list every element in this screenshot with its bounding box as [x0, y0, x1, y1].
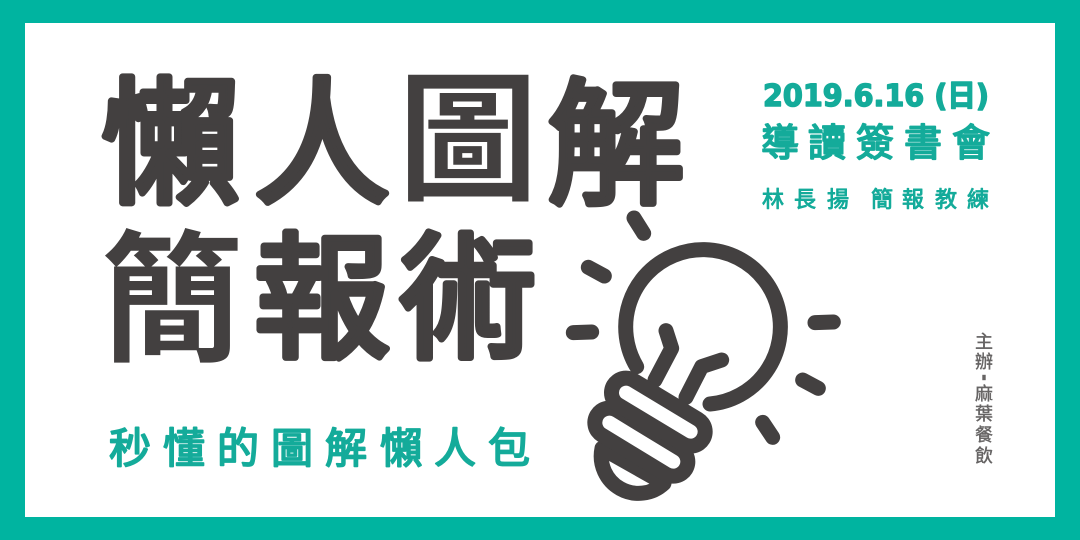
subtitle: 圖 [271, 425, 313, 472]
speaker: 長 [794, 187, 816, 212]
title line 2: 術 [399, 224, 537, 377]
event name: 導 [761, 123, 799, 165]
title line 1: 人 [253, 69, 391, 222]
event name [761, 123, 990, 165]
event name: 簽 [856, 123, 894, 165]
event name: 書 [904, 123, 942, 165]
thread slots [609, 393, 691, 462]
title line 1: 圖 [398, 62, 538, 219]
speaker: 林 [762, 187, 784, 212]
event date: 2019.6.16 (日) [763, 79, 989, 114]
speaker: 練 [967, 187, 989, 212]
title [101, 62, 685, 381]
organizer vertical text: 麻 [975, 384, 993, 404]
organizer vertical text: 餐 [975, 425, 993, 445]
icon: light bulb [573, 218, 833, 493]
organizer vertical text: 辦 [975, 352, 993, 372]
subtitle: 包 [488, 425, 530, 472]
subtitle [109, 425, 530, 472]
subtitle: 的 [217, 425, 259, 472]
subtitle: 解 [325, 425, 367, 472]
organizer vertical text: 主 [975, 332, 993, 352]
event name: 會 [952, 123, 990, 165]
organizer vertical text: 葉 [975, 404, 993, 424]
organizer vertical text [975, 332, 993, 466]
title line 1: 解 [547, 70, 685, 223]
title line 1 [101, 62, 685, 223]
subtitle: 秒 [109, 425, 151, 472]
speaker: 報 [902, 187, 924, 212]
speaker: 揚 [827, 187, 849, 212]
title line 2 [101, 222, 537, 381]
organizer vertical text: 飲 [975, 446, 993, 466]
screw thread 1 [626, 393, 691, 432]
title line 2: 報 [253, 224, 391, 377]
speaker: 教 [935, 187, 957, 212]
speaker [762, 187, 989, 212]
light rays [573, 218, 833, 437]
subtitle: 懂 [163, 425, 205, 472]
screw thread 2 [609, 423, 673, 462]
title line 2: 簡 [101, 222, 243, 381]
bulb glass [626, 250, 780, 404]
bottom cap [601, 448, 664, 493]
speaker: 簡 [871, 187, 893, 212]
event name: 讀 [808, 123, 846, 165]
filaments [655, 331, 722, 397]
title line 1: 懶 [101, 69, 239, 222]
subtitle: 人 [434, 425, 476, 472]
subtitle: 懶 [380, 425, 422, 472]
